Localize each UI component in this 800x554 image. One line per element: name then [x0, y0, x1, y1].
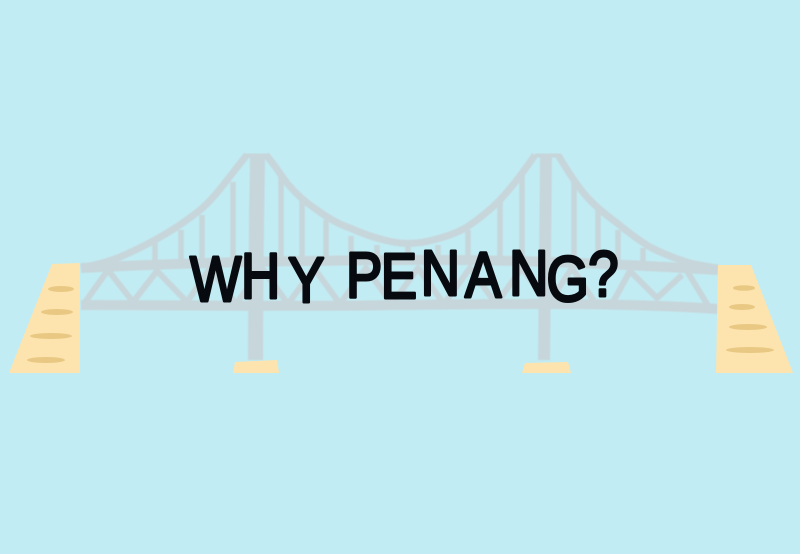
- left anchorage stripes: [27, 286, 74, 363]
- left pier footing: [233, 360, 279, 373]
- right anchorage stripes: [726, 285, 774, 353]
- right anchorage: [716, 265, 793, 373]
- left anchorage: [9, 263, 80, 373]
- left anchorage block: [9, 263, 80, 373]
- right pier footing: [522, 362, 571, 373]
- tower caps: [245, 154, 560, 158]
- bridge structure: [81, 154, 718, 360]
- main suspension cable: [81, 155, 718, 268]
- upper deck chord: [81, 260, 718, 270]
- title: WHYPENANG?: [190, 237, 618, 316]
- left tower: [256, 154, 258, 360]
- right anchorage block: [716, 265, 793, 373]
- deck truss: [83, 268, 710, 309]
- right tower: [544, 154, 546, 360]
- hanger cables: [155, 175, 643, 262]
- lower deck chord: [81, 304, 718, 309]
